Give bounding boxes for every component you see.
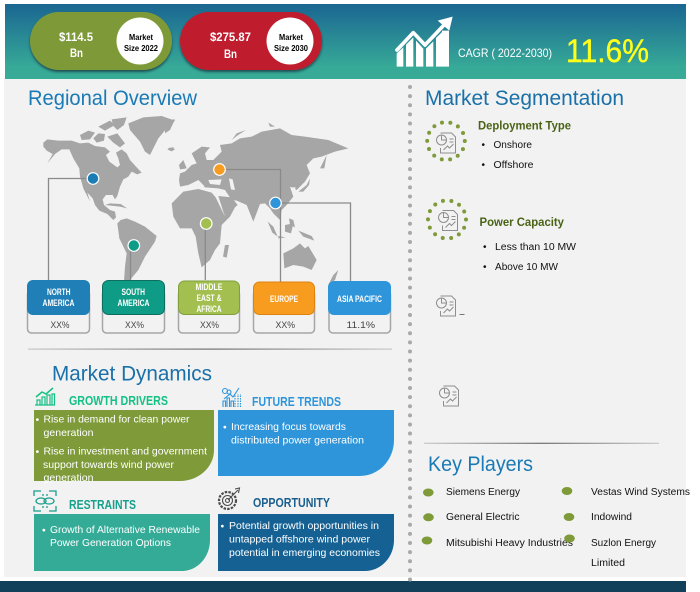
icon: restraints — [34, 491, 56, 511]
list: key players — [422, 487, 690, 569]
region card: Europe — [254, 282, 314, 333]
heading: Key Players: Key Players — [428, 452, 533, 476]
icon: future trends — [222, 388, 240, 407]
region card: Middle East and Africa: AFRICA — [196, 304, 222, 314]
inland seas — [198, 178, 296, 196]
panel: opportunity: • — [220, 520, 224, 532]
map marker: Europe — [214, 164, 225, 175]
panel: opportunity: potential in emerging economies — [229, 547, 380, 559]
region card: South America: SOUTH — [122, 287, 145, 297]
heading: restraints: RESTRAINTS — [69, 498, 136, 512]
region card: South America: AMERICA — [118, 298, 150, 308]
map marker: Asia Pacific — [270, 197, 281, 209]
icon: growth drivers — [35, 388, 55, 405]
heading: future trends: FUTURE TRENDS — [252, 395, 341, 409]
stat pill: market size 2022: Market — [129, 32, 153, 42]
region card: Middle East and Africa — [178, 281, 240, 333]
heading: opportunity: OPPORTUNITY — [253, 496, 331, 510]
stat pill: market size 2030: Market — [279, 32, 303, 42]
list: key players: Vestas Wind Systems — [591, 487, 690, 498]
panel: growth drivers: Rise in investment and government — [44, 446, 207, 458]
region card: South America: XX% — [125, 320, 144, 331]
region card: North America: NORTH — [47, 287, 70, 297]
list: key players: Mitsubishi Heavy Industries — [446, 538, 573, 549]
region card: Europe: XX% — [276, 320, 296, 331]
stat pill: market size 2022: Bn — [70, 48, 83, 60]
icon: document placeholder lower — [440, 386, 458, 406]
panel: future trends: distributed power generation — [231, 434, 364, 446]
segment: power capacity: • — [483, 262, 487, 273]
CAGR value: 11.6% — [566, 33, 649, 69]
stat pill: market size 2030: $275.87 — [210, 32, 251, 44]
panel: growth drivers: • — [36, 414, 40, 426]
segment: deployment type: Deployment Type — [478, 120, 571, 132]
segment: power capacity: • — [483, 242, 487, 253]
region card: North America: AMERICA — [42, 298, 75, 308]
panel: restraints — [34, 514, 210, 571]
region card: North America: XX% — [50, 320, 70, 331]
map marker: South America — [128, 240, 140, 251]
panel: future trends: Increasing focus towards — [231, 421, 346, 433]
panel: restraints: Power Generation Options — [50, 537, 171, 549]
segment: deployment type: Onshore — [494, 140, 532, 151]
panel: opportunity: untapped offshore wind power — [229, 534, 370, 546]
list: key players: General Electric — [446, 512, 520, 523]
segment: power capacity: Less than 10 MW — [495, 242, 577, 253]
heading: Regional Overview: Regional Overview — [28, 86, 197, 110]
panel: future trends: • — [223, 422, 227, 434]
map marker: North America — [87, 173, 99, 184]
stat pill: market size 2030: Size 2030 — [274, 43, 308, 53]
icon: dotted ring with document — [428, 200, 466, 238]
stat pill: market size 2030: Bn — [224, 49, 237, 61]
segment: power capacity: Power Capacity — [480, 217, 565, 229]
stat pill: market size 2022: $114.5 — [59, 32, 94, 44]
region card: Asia Pacific: ASIA PACIFIC — [337, 294, 382, 304]
heading: Market Segmentation: Market Segmentation — [425, 86, 624, 110]
header band — [5, 4, 686, 79]
panel: growth drivers: Rise in demand for clean power — [44, 414, 190, 426]
icon: dotted ring with document — [427, 122, 465, 160]
segment: deployment type: • — [482, 160, 486, 171]
panel: growth drivers: • — [36, 446, 40, 458]
panel: future trends — [218, 410, 394, 476]
panel: opportunity — [218, 514, 394, 571]
region card: Middle East and Africa: XX% — [200, 320, 219, 331]
panel: growth drivers: generation — [44, 427, 94, 439]
CAGR label: CAGR ( 2022-2030) — [458, 46, 552, 60]
segment: power capacity — [428, 200, 577, 273]
stat pill: market size 2030 — [180, 12, 322, 70]
segment: deployment type: Offshore — [494, 160, 534, 171]
icon: opportunity — [219, 488, 240, 509]
heading: growth drivers: GROWTH DRIVERS — [69, 394, 168, 408]
region card: Asia Pacific: 11.1% — [346, 320, 376, 331]
region card: Middle East and Africa: EAST & — [196, 293, 222, 303]
segment: deployment type: • — [482, 140, 486, 151]
segment: power capacity: Above 10 MW — [495, 262, 559, 273]
region card: Asia Pacific — [328, 281, 391, 333]
map marker: Middle East and Africa — [200, 218, 212, 229]
panel: restraints: • — [42, 524, 46, 536]
panel: growth drivers — [34, 410, 214, 484]
panel: growth drivers: support towards wind power — [43, 459, 175, 471]
segment: deployment type — [427, 120, 571, 171]
icon: document placeholder — [436, 296, 464, 316]
world map — [43, 116, 348, 285]
region card: South America — [102, 280, 164, 333]
connector lines — [48, 170, 350, 282]
heading: Market Dynamics: Market Dynamics — [52, 362, 212, 386]
list: key players: Limited — [591, 558, 625, 569]
list: key players: Suzlon Energy — [591, 538, 656, 549]
region card: North America — [27, 280, 90, 333]
footer bar — [0, 581, 686, 592]
stat pill: market size 2022 — [30, 12, 172, 70]
region card: Europe: EUROPE — [270, 294, 298, 304]
panel: restraints: Growth of Alternative Renewable — [50, 524, 200, 536]
panel: opportunity: Potential growth opportunities in — [229, 520, 379, 532]
stat pill: market size 2022: Size 2022 — [124, 43, 158, 53]
panel: growth drivers: generation — [44, 472, 94, 484]
region card: Middle East and Africa: MIDDLE — [196, 282, 222, 292]
list: key players: Siemens Energy — [446, 487, 520, 498]
icon: growth chart with arrow — [397, 17, 453, 67]
list: key players: Indowind — [591, 512, 632, 523]
